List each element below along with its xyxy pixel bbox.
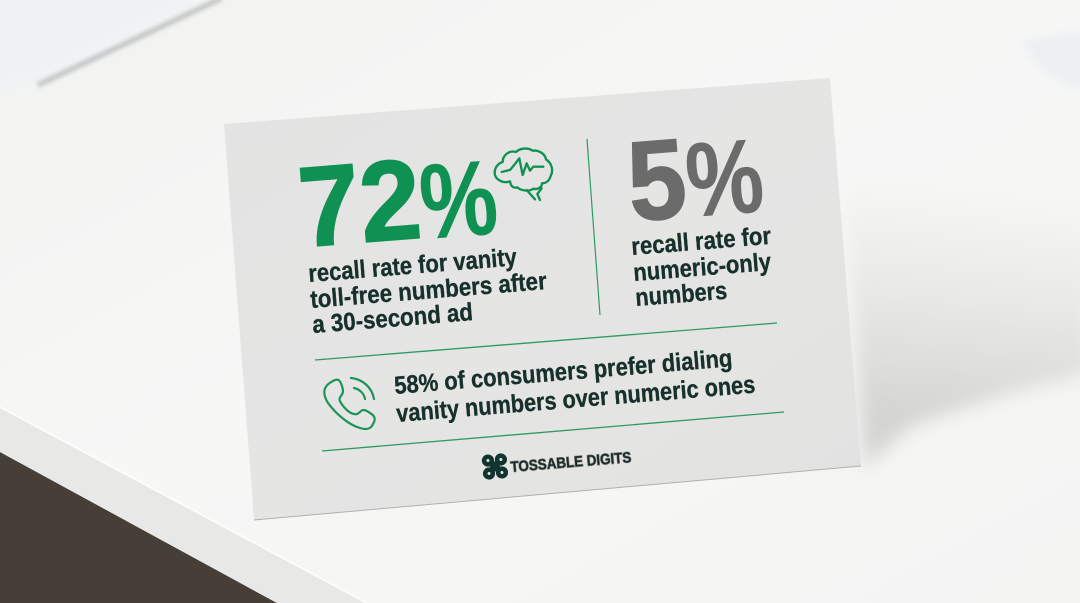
- stat: 72 percent: 72: [294, 136, 426, 272]
- stat: 5 percent: 5: [623, 115, 691, 245]
- description: 5 percent: numeric-only: [632, 248, 772, 287]
- description: 5 percent: numbers: [634, 277, 728, 312]
- table edge highlight: [0, 407, 367, 603]
- description: 5 percent: [630, 222, 772, 312]
- description: 72 percent: recall rate for vanity: [307, 243, 518, 288]
- callout: 58 percent: [393, 344, 756, 428]
- logo mark: [484, 455, 506, 478]
- icon: phone with signal waves: [324, 378, 375, 429]
- callout: 58 percent: vanity numbers over numeric ones: [395, 371, 756, 428]
- table front edge: [0, 407, 367, 603]
- stat: 72 percent: [294, 136, 502, 272]
- description: 72 percent: toll-free numbers after: [309, 267, 548, 314]
- callout: 58 percent: 58% of consumers prefer dialing: [393, 344, 733, 400]
- icon: brain with pulse: [495, 149, 552, 200]
- background shelf edge, blurred: [38, 0, 222, 85]
- logo: Tossable Digits: [484, 449, 632, 478]
- description: 5 percent: recall rate for: [630, 222, 772, 261]
- background wall, blurred: [0, 0, 235, 90]
- description: 72 percent: a 30-second ad: [311, 298, 474, 339]
- stat: 5 percent: [623, 115, 768, 245]
- panel: tent card: [224, 78, 861, 520]
- card shadow on table: [845, 180, 1080, 468]
- description: 72 percent: [307, 243, 548, 339]
- background round object, top right: [1020, 30, 1080, 92]
- logo wordmark: TOSSABLE DIGITS: [510, 449, 632, 476]
- dark floor below the table: [0, 452, 277, 603]
- stat: 5 percent: %: [682, 117, 768, 240]
- stat: 72 percent: %: [416, 138, 502, 262]
